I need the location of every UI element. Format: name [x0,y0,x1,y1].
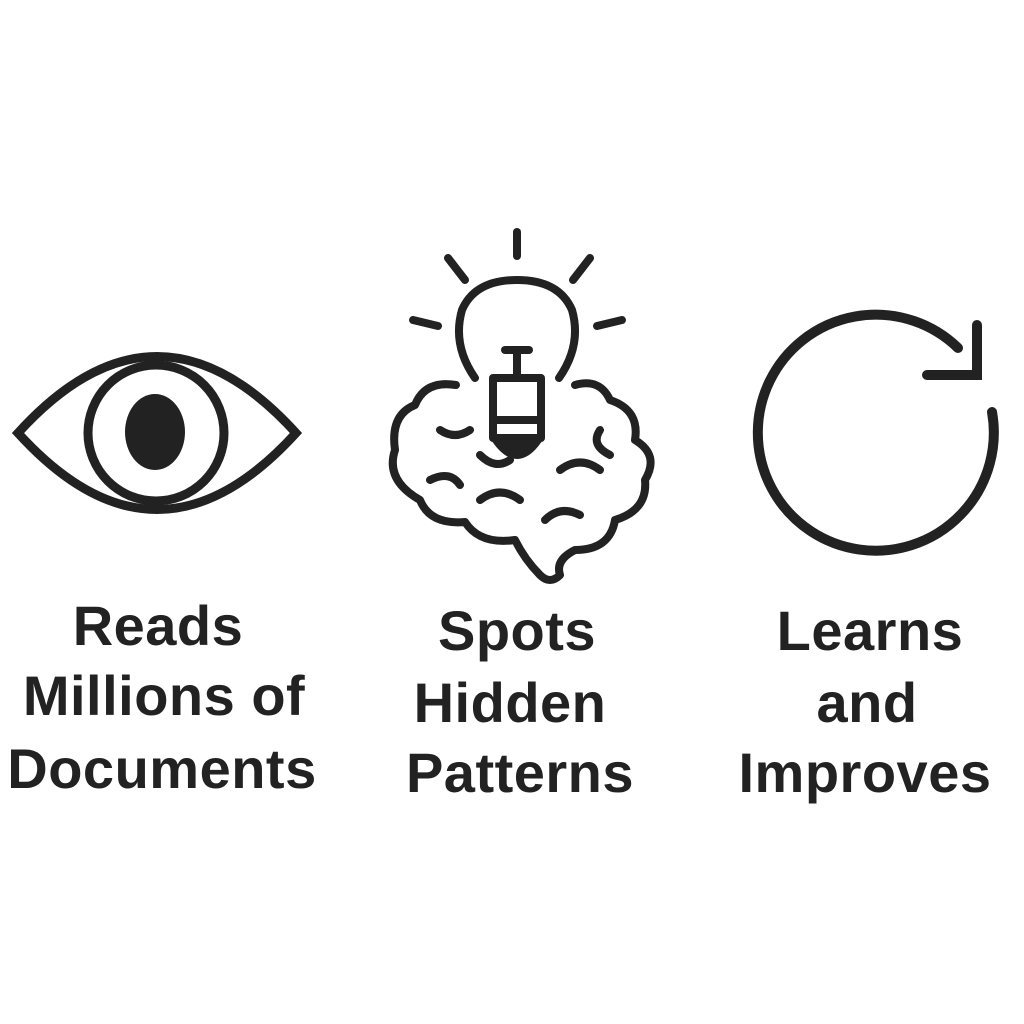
text: reads millions of documents: Documents [7,737,317,800]
text: reads millions of documents: Millions of [23,664,305,727]
text: reads millions of documents [7,594,317,800]
text: learns and improves: Learns [777,599,963,662]
text: spots hidden patterns: Patterns [406,741,634,804]
text: learns and improves: Improves [738,741,992,804]
text: reads millions of documents: Reads [73,594,243,657]
text: spots hidden patterns: Hidden [414,671,606,734]
icon: refresh arrow [758,315,994,551]
text: learns and improves: and [816,671,918,734]
text: spots hidden patterns: Spots [438,599,596,662]
icon: eye [18,356,296,510]
icon: brain with lightbulb [393,232,651,580]
text: spots hidden patterns [406,599,634,804]
text: learns and improves [738,599,992,804]
